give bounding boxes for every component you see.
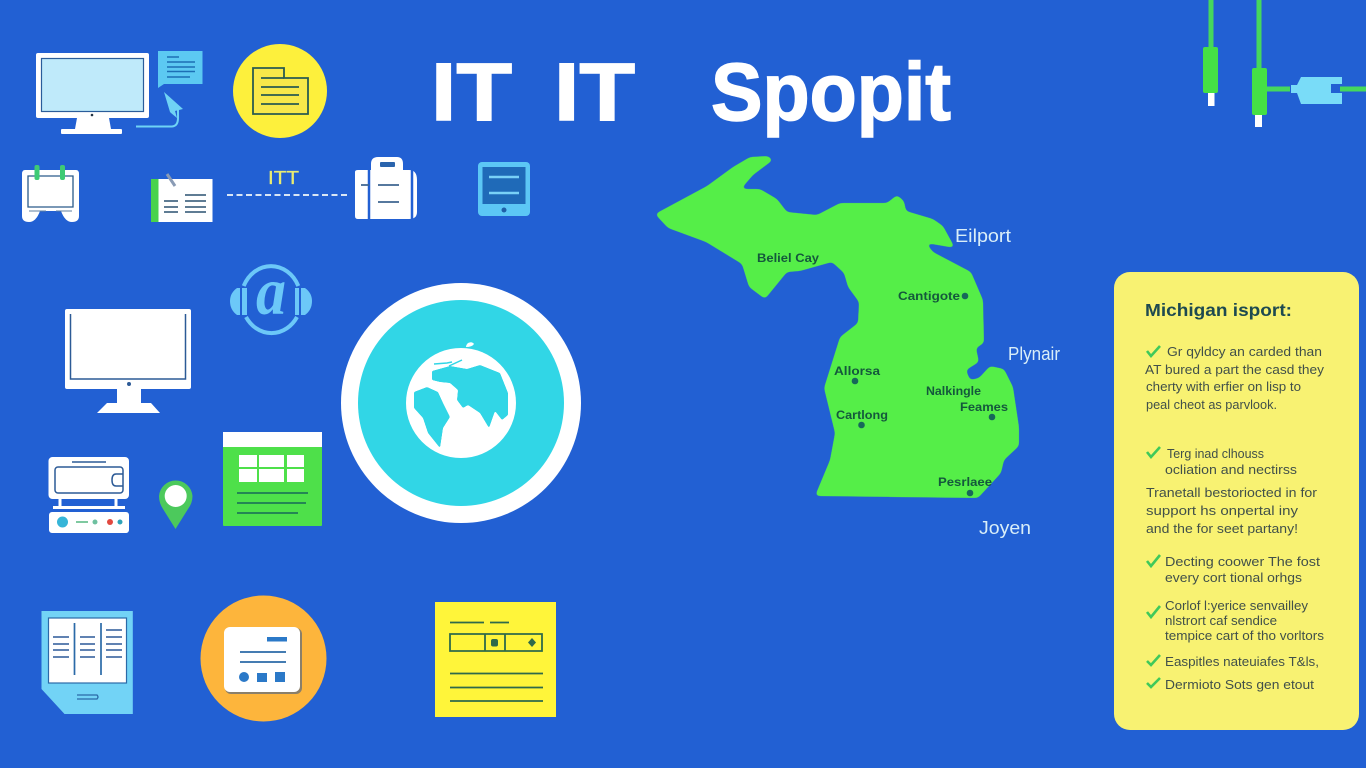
map city labels bbox=[757, 251, 1008, 496]
title: IT bbox=[554, 47, 635, 138]
label: ITT connector: ITT bbox=[268, 168, 299, 188]
icon: location pin bbox=[159, 480, 192, 529]
map city labels: Cartlong bbox=[836, 408, 888, 422]
label: ITT connector bbox=[227, 168, 347, 195]
icon: green data table bbox=[223, 432, 322, 526]
icon: large white monitor bbox=[65, 309, 191, 413]
map city labels: Pesrlaee bbox=[938, 475, 992, 489]
icon: headset with at sign: a bbox=[256, 253, 286, 329]
title: IT bbox=[431, 47, 512, 138]
icon: server stack bbox=[48, 457, 129, 533]
panel body text: cherty with erfier on lisp to bbox=[1146, 380, 1301, 394]
panel body text: Terg inad clhouss bbox=[1167, 447, 1264, 461]
panel heading: Michigan isport: bbox=[1145, 300, 1292, 320]
panel body text: Dermioto Sots gen etout bbox=[1165, 678, 1315, 692]
panel body text: Corlof l:yerice senvailley bbox=[1165, 599, 1309, 613]
icon: desktop monitor with chat bubble and cursor bbox=[36, 51, 202, 134]
title bbox=[431, 47, 951, 138]
panel body text: ocliation and nectirss bbox=[1165, 463, 1297, 477]
panel body text: Easpitles nateuiafes T&ls, bbox=[1165, 655, 1319, 669]
panel body text: AT bured a part the casd they bbox=[1145, 363, 1325, 377]
panel body text: Decting coower The fost bbox=[1165, 555, 1321, 569]
panel body text: every cort tional orhgs bbox=[1165, 571, 1302, 585]
map outer labels bbox=[955, 226, 1060, 538]
panel body text: Gr qyldcy an carded than bbox=[1167, 345, 1322, 359]
icon: headset with at sign bbox=[230, 253, 312, 333]
icon: clipped note card bbox=[151, 174, 212, 222]
icon: calendar stand bbox=[22, 165, 79, 222]
icon: yellow folder circle bbox=[233, 44, 327, 138]
panel body text: and the for seet partany! bbox=[1146, 522, 1298, 536]
map city labels: Beliel Cay bbox=[757, 251, 819, 265]
map city labels: Allorsa bbox=[834, 364, 880, 378]
panel body text bbox=[1145, 345, 1325, 692]
map outer labels: Eilport bbox=[955, 226, 1011, 246]
map city labels: Nalkingle bbox=[926, 384, 981, 398]
icon: yellow form note bbox=[435, 602, 556, 717]
icon: tablet bbox=[478, 162, 530, 216]
panel body text: support hs onpertal iny bbox=[1146, 504, 1299, 518]
map city labels: Feames bbox=[960, 400, 1008, 414]
icon: globe badge bbox=[341, 283, 581, 523]
icon: blue document reader bbox=[42, 611, 133, 714]
panel check marks bbox=[1147, 346, 1160, 687]
panel body text: Tranetall bestoriocted in for bbox=[1146, 486, 1317, 500]
panel body text: nlstrort caf sendice bbox=[1165, 614, 1277, 628]
panel: Michigan support bbox=[1114, 272, 1359, 730]
panel body text: tempice cart of tho vorltors bbox=[1165, 629, 1324, 643]
icon: network cables bbox=[1203, 0, 1366, 127]
icon: orange circle with card bbox=[200, 596, 326, 722]
panel body text: peal cheot as parvlook. bbox=[1146, 398, 1277, 412]
map city labels: Cantigote bbox=[898, 289, 960, 303]
map outer labels: Joyen bbox=[979, 518, 1031, 538]
title: Spopit bbox=[711, 47, 951, 138]
icon: briefcase bbox=[355, 157, 417, 219]
map outer labels: Plynair bbox=[1008, 344, 1060, 364]
map: Michigan bbox=[655, 156, 1019, 498]
